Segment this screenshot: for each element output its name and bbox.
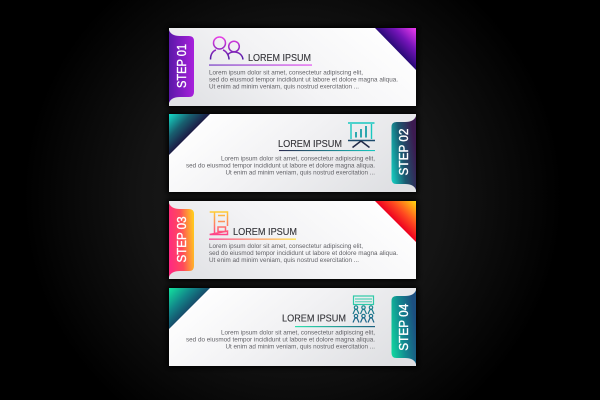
body text 1: Ut enim ad minim veniam, quis nostrud exercitation ... (209, 84, 359, 90)
step 02 tab (392, 116, 416, 190)
corner triangle 3 (375, 201, 416, 242)
body text 3: sed do eiusmod tempor incididunt ut labore et dolore magna aliqua. (209, 250, 398, 257)
body text 2: sed do eiusmod tempor incididunt ut labore et dolore magna aliqua. (186, 162, 375, 170)
heading underline 2 (279, 150, 375, 151)
card 1 background (169, 28, 416, 106)
card 2 background (169, 114, 416, 192)
heading underline 1 (209, 64, 312, 66)
card 4 background (169, 288, 416, 366)
panel: step 02 (169, 114, 416, 192)
icon: people (210, 37, 243, 60)
heading 2: LOREM IPSUM (278, 139, 342, 150)
body text 4: Lorem ipsum dolor sit amet, consectetur adipiscing elit, (221, 330, 375, 336)
heading 1: LOREM IPSUM (248, 53, 311, 64)
step 04 tab (392, 290, 416, 364)
step 03 tab (169, 203, 194, 277)
body text 4: sed do eiusmod tempor incididunt ut labore et dolore magna aliqua. (186, 336, 375, 344)
body text 3: Ut enim ad minim veniam, quis nostrud exercitation ... (209, 257, 359, 264)
heading 4: LOREM IPSUM (282, 314, 346, 324)
step 01 tab: STEP 01 (175, 44, 189, 88)
corner triangle 4 (169, 288, 210, 329)
step 02 tab: STEP 02 (397, 128, 411, 176)
heading underline 4 (295, 326, 375, 327)
panel: step 01 (169, 28, 416, 106)
card 3 background (169, 201, 416, 279)
corner triangle 2 (169, 114, 210, 155)
body text 1: sed do eiusmod tempor incididunt ut labore et dolore magna aliqua. (209, 76, 398, 84)
body text 2: Lorem ipsum dolor sit amet, consectetur adipiscing elit, (221, 156, 375, 162)
icon: document (210, 212, 228, 234)
step 03 tab: STEP 03 (175, 216, 189, 262)
icon: presentation board (348, 123, 375, 148)
step 01 tab (169, 30, 194, 103)
panel: step 03 (169, 201, 416, 279)
heading underline 3 (209, 238, 296, 240)
body text 3: Lorem ipsum dolor sit amet, consectetur adipiscing elit, (209, 243, 363, 250)
heading 3: LOREM IPSUM (233, 227, 297, 238)
body text 2: Ut enim ad minim veniam, quis nostrud exercitation ... (226, 170, 375, 176)
panel: step 04 (169, 288, 416, 366)
body text 1: Lorem ipsum dolor sit amet, consectetur adipiscing elit, (209, 70, 363, 76)
icon: audience and screen (353, 296, 374, 322)
body text 4: Ut enim ad minim veniam, quis nostrud exercitation ... (226, 344, 375, 350)
corner triangle 1 (375, 28, 416, 70)
card shadows (167, 26, 418, 368)
step 04 tab: STEP 04 (397, 304, 411, 351)
